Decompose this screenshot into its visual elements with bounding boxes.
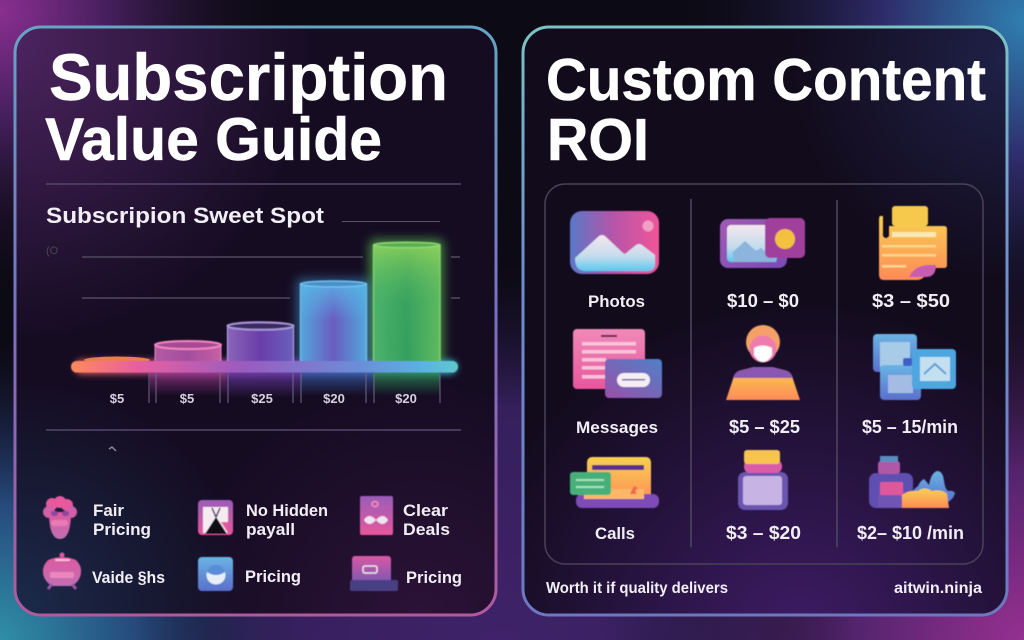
footer brand: aitwin.ninja [894,580,982,597]
label: calls: Calls [595,524,635,543]
footer note: Worth it if quality delivers [546,580,728,597]
icon: calls laptop [570,457,659,508]
label: pricing: Pricing [245,567,301,586]
small axis mark: (O [46,245,59,257]
icon: pricing device [350,556,398,591]
label: value: Vaide §hs [92,568,165,587]
bar: tier 1 [84,356,150,364]
label: clear deals: Clear [403,501,448,520]
label: clear deals [403,501,450,539]
bar labels: $25 [251,391,273,406]
icon: no hidden paywall [198,500,233,535]
label: pricing: Pricing [406,568,462,587]
label: fair pricing: Fair [93,501,124,520]
icon: document bundle [879,206,947,280]
icon: pricing badge [198,557,233,591]
title: custom content roi: Custom Content [546,47,986,113]
bar labels [110,391,417,406]
icon: image stack [873,334,956,400]
title: custom content roi: ROI [547,107,649,173]
price: messages low: $5 – $25 [729,417,800,437]
label: messages: Messages [576,418,658,437]
icon: bottle and hills [869,456,955,508]
title: subscription value guide [45,40,448,173]
bar: tier 4 [300,281,366,364]
bar labels: $20 [395,391,417,406]
price: photos low: $10 – $0 [727,291,799,311]
label: no hidden paywall: payall [246,520,295,539]
bar: tier 2 [155,341,221,364]
title: subscription value guide: Value Guide [45,106,382,173]
icon: jar [738,450,788,510]
bar: tier 5 [374,242,440,364]
bar labels: $20 [323,391,345,406]
label: fair pricing [93,501,151,539]
panel: custom content roi [523,27,1007,615]
icon: photo pricing [720,218,805,268]
title: custom content roi [546,47,986,173]
icon: person [726,325,800,400]
price: calls per minute: $2– $10 /min [857,523,964,543]
icon grid: value features [43,496,462,591]
panel: subscription value guide [15,27,496,615]
chart heading: Subscripion Sweet Spot [46,203,325,228]
price: messages per minute: $5 – 15/min [862,417,958,437]
bar labels: $5 [180,391,194,406]
icon: clear deals [360,496,393,535]
bar chart: subscription sweet spot [71,239,460,406]
price: calls low: $3 – $20 [726,523,801,543]
label: fair pricing: Pricing [93,520,151,539]
icon: value pot [43,552,81,589]
label: no hidden paywall [246,501,328,539]
label: photos: Photos [588,292,645,311]
pricing table [545,184,983,564]
bar labels: $5 [110,391,124,406]
bar: tier 3 [228,322,294,364]
baseline bar [71,361,458,372]
label: clear deals: Deals [403,520,450,539]
icon: fair pricing [43,496,77,539]
title: subscription value guide: Subscription [49,40,448,114]
icon: photos [570,211,659,274]
icon: messages [573,329,662,398]
label: no hidden paywall: No Hidden [246,501,328,520]
price: photos high: $3 – $50 [872,291,950,311]
